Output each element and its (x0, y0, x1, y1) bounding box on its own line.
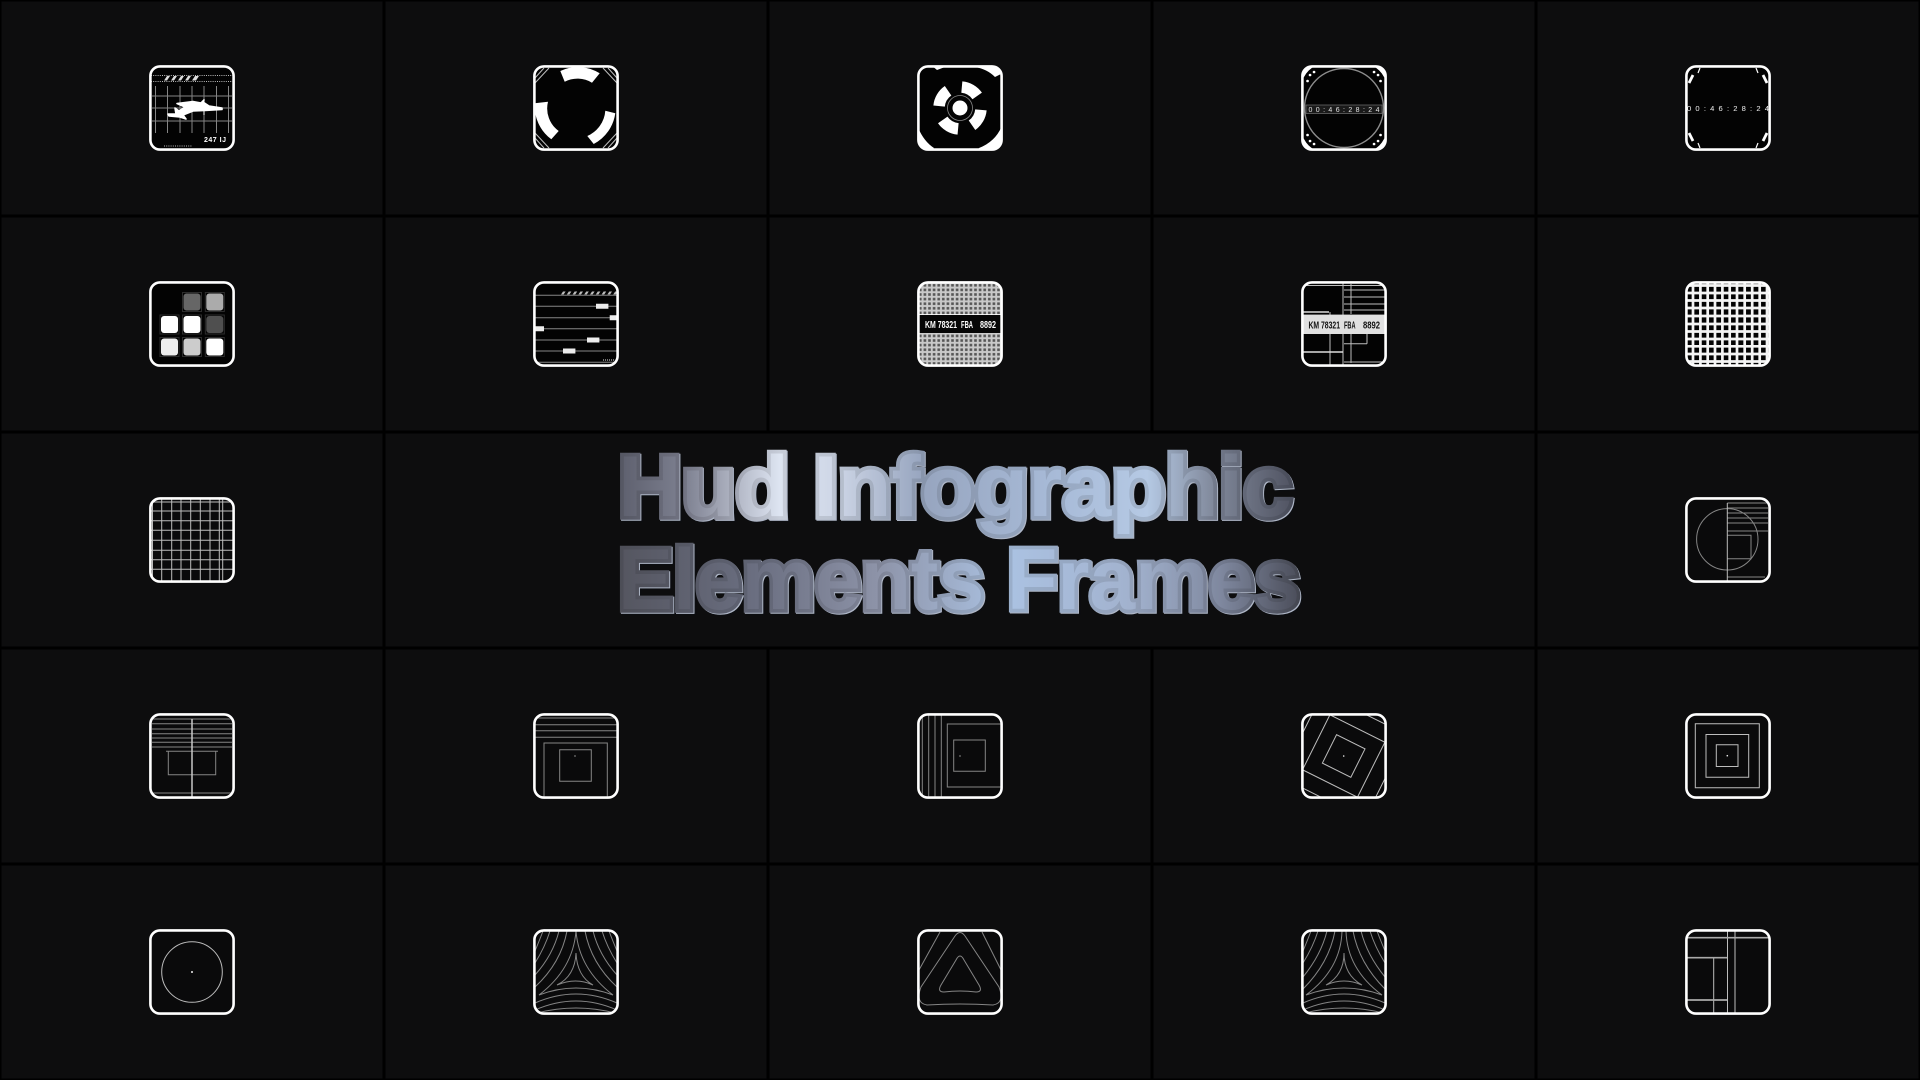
icon: rotary segments frame (917, 65, 1003, 151)
icon: single circle frame (150, 930, 234, 1014)
panel: curved wave lines tile (386, 866, 766, 1078)
icon: thick grid frame (1685, 281, 1771, 367)
icon: cross and stripes frame (150, 714, 234, 798)
panel: thick grid tile (1538, 218, 1918, 430)
icon: timecode ticks frame (1685, 65, 1771, 151)
icon: timecode ticks frame: 00:46:28:24 (1687, 104, 1769, 113)
panel: rotary segments tile (770, 2, 1150, 214)
panel: narrow curved lines tile (1154, 866, 1534, 1078)
icon: slider lines frame (534, 282, 619, 366)
panel: concentric squares tile (1538, 650, 1918, 862)
icon: nested squares side stripes frame (918, 714, 1002, 798)
panel: rotated squares tile (1154, 650, 1534, 862)
panel: line layout label tile (1154, 218, 1534, 430)
panel: plane radar tile (2, 2, 382, 214)
icon: line layout label frame: 8892 (1363, 320, 1380, 332)
panel: circle and stripes tile (1538, 434, 1918, 646)
icon: dot mesh label frame (917, 281, 1003, 367)
panel: button matrix tile (2, 218, 382, 430)
icon: plane radar frame (150, 66, 234, 150)
panel: three arc segments tile (386, 2, 766, 214)
panel: rectangle layout lines tile (1538, 866, 1918, 1078)
icon: nested squares top stripes frame (534, 714, 618, 798)
title line 2: Elements Frames (618, 532, 1300, 628)
panel: cross and stripes tile (2, 650, 382, 862)
panel: timecode ticks tile (1538, 2, 1918, 214)
icon: rounded triangles frame (918, 930, 1002, 1014)
panel: slider lines tile (386, 218, 766, 430)
icon: circle and stripes frame (1686, 498, 1770, 582)
panel: title centre panel (386, 434, 1534, 646)
icon: plane radar frame: 247 IJ (204, 137, 226, 144)
panel: dot mesh label tile (770, 218, 1150, 430)
icon: dot mesh label frame: 8892 (980, 320, 996, 331)
panel: fine grid tile (2, 434, 382, 646)
icon: concentric squares frame (1686, 714, 1770, 798)
icon: dot mesh label frame: KM 78321 (925, 320, 957, 331)
icon: curved wave lines frame (534, 930, 618, 1014)
panel: rounded triangles tile (770, 866, 1150, 1078)
icon: timecode dial frame (1301, 65, 1387, 151)
icon: line layout label frame: FBA (1344, 320, 1356, 332)
title line 1: Hud Infographic (618, 439, 1292, 535)
panel: single circle tile (2, 866, 382, 1078)
panel: nested squares top stripes tile (386, 650, 766, 862)
icon: rotated squares frame (1301, 713, 1387, 799)
panel: timecode dial tile (1154, 2, 1534, 214)
icon: timecode dial frame: 00:46:28:24 (1308, 107, 1380, 114)
icon: three arc segments frame (534, 66, 618, 150)
panel: nested squares side stripes tile (770, 650, 1150, 862)
icon: dot mesh label frame: FBA (961, 320, 973, 331)
icon: rectangle layout lines frame (1686, 930, 1770, 1014)
icon: line layout label frame: KM 78321 (1308, 320, 1340, 332)
icon: button matrix frame (150, 282, 234, 366)
icon: fine grid frame (150, 498, 234, 582)
icon: narrow curved lines frame (1302, 930, 1386, 1014)
icon: line layout label frame (1301, 282, 1387, 366)
title (618, 439, 1300, 628)
